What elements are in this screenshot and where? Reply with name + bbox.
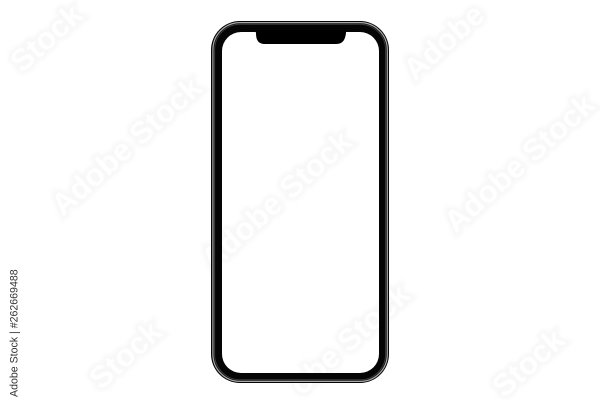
watermarks: Adobe Stock	[194, 123, 359, 276]
watermarks: Adobe Stock	[437, 86, 600, 239]
watermarks: Stock	[485, 321, 572, 404]
watermarks: Adobe Stock	[194, 123, 359, 276]
watermarks: Adobe Stock	[44, 69, 209, 222]
watermarks: obe Stock	[283, 276, 417, 402]
watermarks: Adobe Stock	[44, 69, 209, 222]
watermarks: obe Stock	[283, 276, 417, 402]
watermarks: Stock	[485, 321, 572, 404]
frame inner shade	[215, 24, 386, 380]
watermarks: Adobe Stock	[437, 86, 600, 239]
phone frame	[211, 21, 389, 383]
frame highlight ring	[213, 23, 387, 381]
stock image id: Adobe Stock | #262669488	[8, 269, 20, 397]
notch	[255, 30, 346, 44]
watermarks: Stock	[82, 313, 169, 396]
watermarks: Stock	[82, 313, 169, 396]
